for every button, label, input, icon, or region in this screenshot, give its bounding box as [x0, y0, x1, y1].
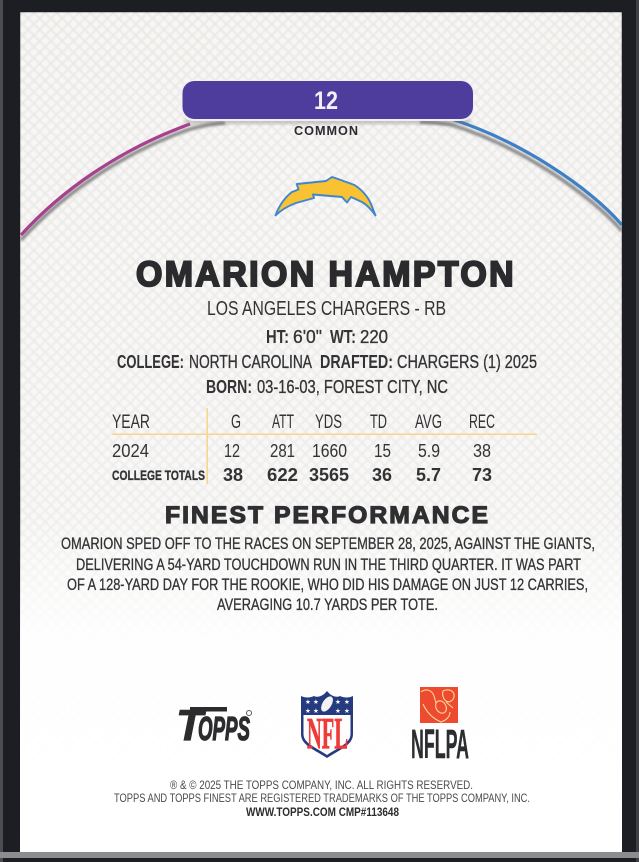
- stars: [305, 698, 350, 715]
- table college totals row: [112, 465, 492, 485]
- table 2024 row: [112, 441, 491, 461]
- player bio: [117, 327, 537, 397]
- table college totals row: 622: [267, 465, 298, 485]
- player bio: HT:: [266, 327, 289, 347]
- logo: topps: T: [176, 701, 206, 750]
- table 2024 row: 38: [473, 441, 491, 461]
- table 2024 row: 15: [374, 441, 391, 461]
- player bio: DRAFTED:: [320, 352, 393, 372]
- rarity label: COMMON: [294, 123, 359, 138]
- table header row: ATT: [272, 412, 294, 433]
- performance description: AVERAGING 10.7 YARDS PER TOTE.: [217, 596, 438, 614]
- stars: ★: [335, 707, 341, 715]
- stats table: [112, 408, 537, 485]
- logo: topps: OPPS: [198, 710, 250, 747]
- player bio: WT:: [330, 327, 356, 347]
- table header row: TD: [370, 412, 387, 433]
- table college totals row: 73: [472, 465, 492, 485]
- legal text: [114, 778, 530, 819]
- table header row: YDS: [315, 412, 342, 433]
- football: [319, 694, 335, 714]
- card number badge: [180, 80, 474, 123]
- table 2024 row: 281: [270, 441, 295, 461]
- legal text: TOPPS AND TOPPS FINEST ARE REGISTERED TRADEMARKS OF THE TOPPS COMPANY, INC.: [114, 791, 530, 805]
- icon: chargers bolt logo: [276, 177, 376, 216]
- table college totals row: 38: [223, 465, 243, 485]
- player bio: 220: [360, 327, 388, 347]
- player line art: [421, 690, 454, 722]
- logo: nfl shield: [301, 691, 353, 758]
- card number: 12: [314, 87, 338, 115]
- table 2024 row: 5.9: [418, 441, 440, 461]
- table 2024 row: 1660: [312, 441, 347, 461]
- stars: ★: [305, 698, 311, 706]
- table college totals row: 36: [372, 465, 392, 485]
- team and position: LOS ANGELES CHARGERS - RB: [207, 298, 446, 320]
- legal text: ® & © 2025 THE TOPPS COMPANY, INC. ALL RIGHTS RESERVED.: [170, 778, 473, 792]
- player bio: COLLEGE:: [117, 352, 184, 372]
- table header row: REC: [469, 412, 495, 433]
- performance description: [61, 535, 595, 614]
- logo: topps: [176, 701, 252, 750]
- logo: nflpa: [411, 687, 469, 767]
- stars: ★: [305, 707, 311, 715]
- player bio: 6'0": [293, 327, 322, 347]
- stars: ★: [313, 707, 319, 715]
- section heading: finest performance: FINEST PERFORMANCE: [165, 502, 490, 529]
- logo: nfl shield: NFL: [307, 709, 348, 758]
- stars: ★: [344, 698, 350, 706]
- player bio: NORTH CAROLINA: [189, 352, 312, 372]
- stars: ★: [335, 698, 341, 706]
- table header row: [112, 412, 495, 433]
- player name: OMARION HAMPTON: [136, 255, 516, 294]
- table 2024 row: 2024: [112, 441, 149, 461]
- player bio: BORN:: [206, 377, 252, 397]
- table header row: YEAR: [112, 412, 150, 433]
- legal text: WWW.TOPPS.COM CMP#113648: [246, 805, 399, 819]
- player bio: 03-16-03, FOREST CITY, NC: [257, 377, 448, 397]
- decorative arc: [21, 118, 622, 240]
- table college totals row: 5.7: [416, 465, 441, 485]
- table 2024 row: 12: [224, 441, 240, 461]
- table college totals row: COLLEGE TOTALS: [112, 467, 205, 483]
- stars: ★: [313, 698, 319, 706]
- table header row: AVG: [415, 412, 442, 433]
- stars: ★: [344, 707, 350, 715]
- table header row: G: [231, 412, 241, 433]
- player bio: CHARGERS (1) 2025: [397, 352, 537, 372]
- table college totals row: 3565: [309, 465, 349, 485]
- text: NFLPA: [411, 721, 469, 767]
